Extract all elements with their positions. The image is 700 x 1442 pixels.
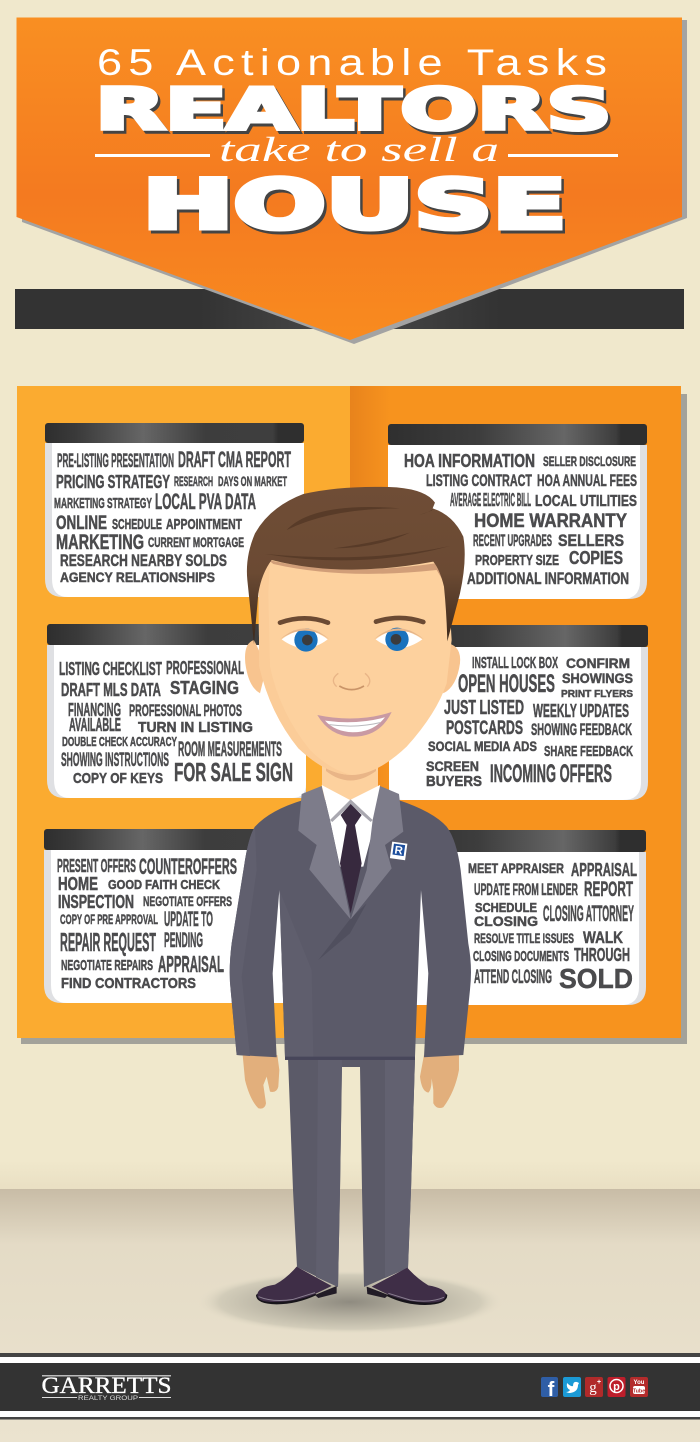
panel: appraisal and closing tasks xyxy=(387,830,646,1005)
head xyxy=(245,487,465,775)
task words: RESEARCH NEARBY SOLDS xyxy=(60,551,227,570)
task words: PRICING STRATEGY xyxy=(56,472,170,492)
task words: DRAFT MLS DATA xyxy=(61,680,161,700)
task words: LOCAL PVA DATA xyxy=(155,489,256,514)
task words: HOA ANNUAL FEES xyxy=(537,471,637,490)
task words: WALK xyxy=(583,928,624,947)
floor xyxy=(0,1189,700,1442)
task words: OPEN HOUSES xyxy=(458,670,555,698)
task words: SHARE FEEDBACK xyxy=(544,743,633,760)
task words: CURRENT MORTGAGE xyxy=(148,534,244,550)
shirt and collar xyxy=(322,785,380,867)
task words: SCREEN xyxy=(426,758,479,774)
task words: AGENCY RELATIONSHIPS xyxy=(60,569,215,585)
floor shadow under figure xyxy=(196,1270,504,1334)
shoes xyxy=(256,1267,447,1305)
task words: INSPECTION xyxy=(58,892,134,912)
task words xyxy=(468,860,637,994)
panel: MLS and marketing preparation tasks: ROOM MEASUREMENTS xyxy=(178,738,282,761)
task words: RESOLVE TITLE ISSUES xyxy=(474,930,574,946)
title line: 65 Actionable Tasks: 65 Actionable Tasks xyxy=(97,42,607,83)
task words: SCHEDULE xyxy=(112,516,162,533)
task words: MEET APPRAISER xyxy=(468,860,564,876)
task words: AVAILABLE xyxy=(69,715,121,735)
task words: FINANCING xyxy=(68,700,121,720)
title line: HOUSE xyxy=(142,166,569,248)
header banner xyxy=(16,18,687,344)
necktie xyxy=(340,804,362,913)
icon: youtube: Tube xyxy=(633,1388,645,1394)
task words: PRE-LISTING PRESENTATION xyxy=(57,451,174,472)
panel: disclosure and document tasks xyxy=(388,424,647,599)
icon: youtube: You xyxy=(634,1380,645,1386)
panel: offer and negotiation tasks: COUNTEROFFERS xyxy=(139,854,237,879)
task words xyxy=(54,447,291,585)
task words: RESEARCH xyxy=(174,473,213,489)
task words: ADDITIONAL INFORMATION xyxy=(467,569,629,588)
task words: MARKETING xyxy=(56,531,144,554)
task words xyxy=(57,854,237,992)
realtor pin: R xyxy=(394,844,404,858)
task words: POSTCARDS xyxy=(446,718,523,739)
task words: INSTALL LOCK BOX xyxy=(472,655,558,672)
title line: HOUSE: HOUSE xyxy=(142,166,566,245)
task words: REPORT xyxy=(584,878,633,901)
task words: STAGING xyxy=(170,678,239,698)
task words: SELLERS xyxy=(558,531,624,550)
task words: SCHEDULE xyxy=(475,901,537,915)
icon: facebook: f xyxy=(548,1379,555,1401)
task words: ONLINE xyxy=(56,513,107,534)
task words: FIND CONTRACTORS xyxy=(61,975,196,992)
task words: COPIES xyxy=(569,548,623,568)
task words: DAYS ON MARKET xyxy=(218,473,287,489)
hair strands xyxy=(265,507,450,560)
task words: LISTING CONTRACT xyxy=(426,471,532,490)
task words: NEGOTIATE OFFERS xyxy=(143,893,232,909)
neck xyxy=(322,760,378,802)
task words xyxy=(426,655,633,790)
task words: BUYERS xyxy=(426,773,482,790)
orange board xyxy=(17,386,687,1044)
social media icons xyxy=(541,1377,648,1401)
task words: CLOSING DOCUMENTS xyxy=(473,948,569,965)
icon: pinterest: p xyxy=(613,1381,620,1393)
task words: PRESENT OFFERS xyxy=(57,856,136,876)
task words: LISTING CHECKLIST xyxy=(59,659,162,679)
task words: REPAIR REQUEST xyxy=(60,927,156,957)
logo: Garretts Realty Group: REALTY GROUP xyxy=(78,1396,138,1402)
task words: PENDING xyxy=(164,929,203,952)
task words: SHOWINGS xyxy=(562,670,633,686)
task words: GOOD FAITH CHECK xyxy=(108,878,220,892)
panel: listing preparation tasks xyxy=(45,423,304,597)
task words: FOR SALE SIGN xyxy=(174,757,293,787)
title line: REALTORS: REALTORS xyxy=(98,80,614,146)
icon: google plus xyxy=(585,1377,603,1397)
icon: twitter xyxy=(563,1377,581,1397)
trousers xyxy=(288,1058,415,1287)
task words: UPDATE TO xyxy=(164,908,213,931)
task words: NEGOTIATE REPAIRS xyxy=(61,957,153,974)
smile xyxy=(317,712,392,737)
task words: ATTEND CLOSING xyxy=(474,967,552,988)
task words: COPY OF KEYS xyxy=(73,770,163,787)
suit jacket xyxy=(230,785,471,1060)
realtor pin xyxy=(390,842,407,860)
lapels xyxy=(298,786,403,919)
task words: DOUBLE CHECK ACCURACY xyxy=(62,734,177,749)
task words: PROPERTY SIZE xyxy=(475,552,559,569)
task words xyxy=(404,451,637,588)
nose xyxy=(333,673,370,690)
icon: google plus: g xyxy=(589,1380,597,1396)
eyebrows xyxy=(280,618,423,623)
panel: listing preparation tasks: DRAFT CMA REPORT xyxy=(178,447,291,472)
logo: Garretts Realty Group: GARRETTS xyxy=(42,1373,172,1398)
panel: showing and promotion tasks xyxy=(389,625,648,800)
panel: offer and negotiation tasks xyxy=(44,829,303,1003)
hands xyxy=(243,1055,459,1109)
title line: REALTORS xyxy=(96,77,614,146)
task words: PRINT FLYERS xyxy=(561,689,633,700)
task words: APPRAISAL xyxy=(158,951,224,977)
title line: take to sell a xyxy=(95,130,618,169)
figure: realtor in suit xyxy=(230,487,471,1305)
task words: AVERAGE ELECTRIC BILL xyxy=(450,490,531,510)
icon: google plus: + xyxy=(597,1379,601,1386)
task words: WEEKLY UPDATES xyxy=(533,701,629,721)
task words: HOA INFORMATION xyxy=(404,451,535,471)
task words: APPRAISAL xyxy=(571,860,637,880)
eyes xyxy=(280,628,424,652)
task words: PROFESSIONAL PHOTOS xyxy=(129,701,242,720)
task words: SOCIAL MEDIA ADS xyxy=(428,738,537,754)
task words: CONFIRM xyxy=(566,655,630,671)
task words: CLOSING xyxy=(474,913,538,929)
task words: HOME WARRANTY xyxy=(474,511,627,532)
task words: UPDATE FROM LENDER xyxy=(474,880,578,899)
task words: PROFESSIONAL xyxy=(166,658,244,678)
task words: SHOWING INSTRUCTIONS xyxy=(61,750,169,771)
header ribbon bar xyxy=(15,289,684,329)
task words: LOCAL UTILITIES xyxy=(535,493,637,510)
face xyxy=(258,558,452,775)
hairline shade xyxy=(268,560,447,587)
task words: THROUGH xyxy=(574,945,630,965)
task words: HOME xyxy=(58,874,98,894)
task words: TURN IN LISTING xyxy=(138,719,253,736)
hair xyxy=(247,487,465,644)
title line: REALTORS: REALTORS xyxy=(96,77,612,143)
task words: RECENT UPGRADES xyxy=(473,531,552,550)
title line: HOUSE: HOUSE xyxy=(145,169,569,248)
task words: SOLD xyxy=(559,963,633,994)
title line: take to sell a: take to sell a xyxy=(219,130,499,169)
ears xyxy=(245,640,460,693)
panel: MLS and marketing preparation tasks xyxy=(47,624,306,798)
task words: SELLER DISCLOSURE xyxy=(543,453,636,469)
task words xyxy=(59,658,293,787)
footer band xyxy=(0,1353,700,1420)
task words: JUST LISTED xyxy=(444,697,524,719)
icon: youtube xyxy=(630,1377,648,1397)
task words: COPY OF PRE APPROVAL xyxy=(60,911,158,927)
task words: MARKETING STRATEGY xyxy=(54,495,152,512)
task words: APPOINTMENT xyxy=(166,516,242,533)
